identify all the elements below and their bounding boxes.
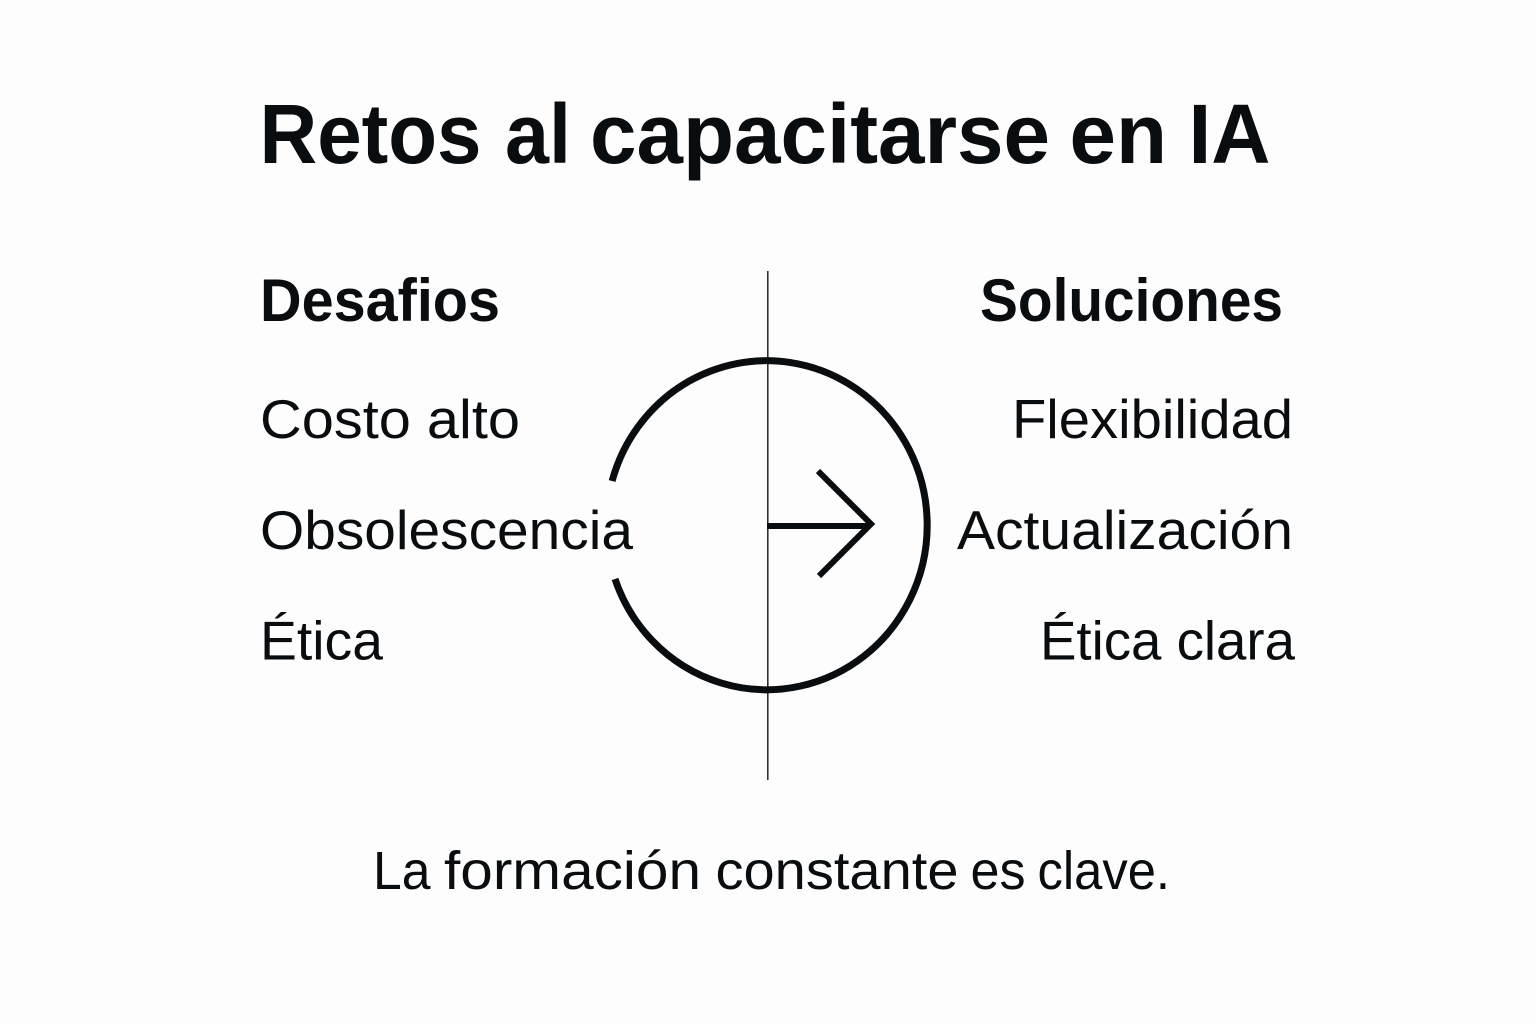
title: Retos	[260, 87, 482, 181]
title: capacitarse	[590, 87, 1050, 181]
item: obsolescencia: Obsolescencia	[260, 499, 633, 561]
item: costo alto: Costo alto	[260, 388, 520, 450]
center divider line	[767, 271, 769, 780]
footer caption: formación	[444, 841, 701, 901]
panel: desafios	[260, 267, 633, 672]
icon: arrow	[767, 471, 871, 576]
title: IA	[1188, 87, 1270, 181]
heading: soluciones: Soluciones	[980, 267, 1283, 334]
title: en	[1070, 87, 1167, 181]
item: etica: Ética	[260, 610, 383, 672]
footer caption	[373, 841, 1170, 901]
title	[260, 87, 1270, 181]
item: etica clara: Ética clara	[1040, 610, 1295, 672]
item: flexibilidad: Flexibilidad	[1012, 388, 1293, 450]
heading: desafios: Desafios	[260, 267, 500, 334]
panel: soluciones	[957, 267, 1295, 672]
footer caption: constante	[716, 841, 958, 901]
title: al	[505, 87, 571, 181]
footer caption: es	[970, 841, 1026, 901]
footer caption: clave.	[1038, 841, 1170, 901]
icon: open circle	[612, 361, 927, 690]
footer caption: La	[373, 841, 431, 901]
item: actualizacion: Actualización	[957, 499, 1293, 561]
